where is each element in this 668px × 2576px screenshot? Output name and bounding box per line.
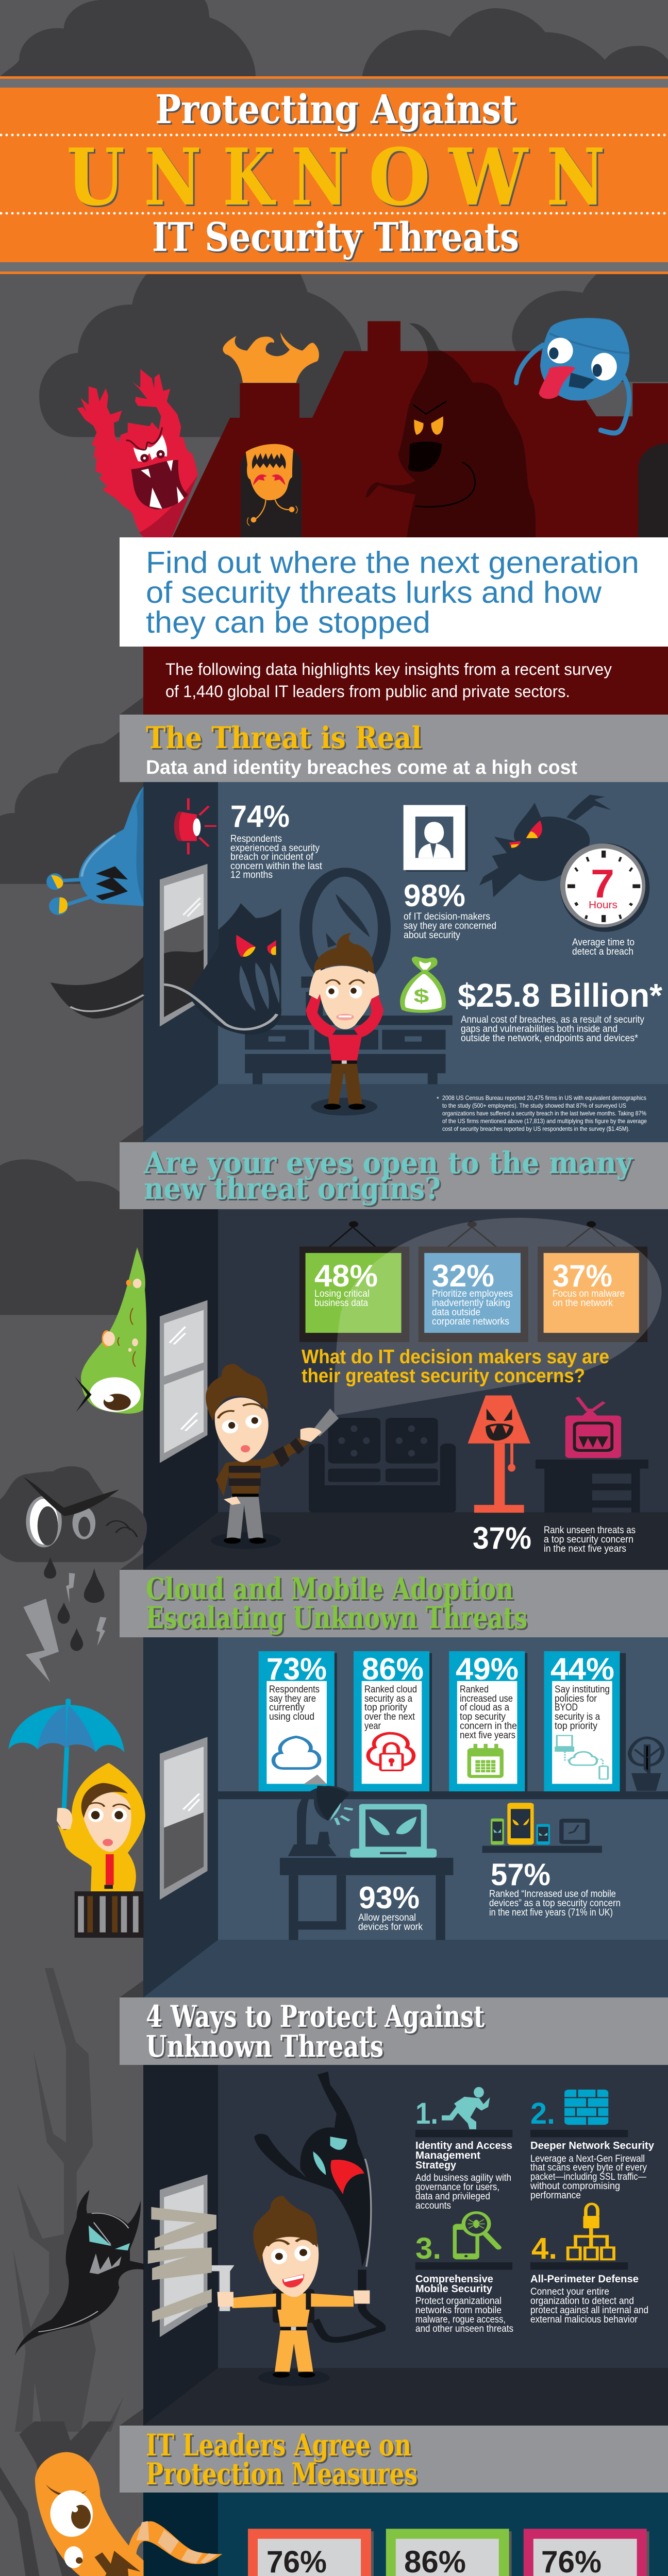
title banner: K bbox=[223, 131, 276, 223]
TV monster bbox=[565, 1397, 621, 1458]
title banner: IT Security Threats bbox=[152, 214, 519, 261]
stat: 93%: 93% bbox=[359, 1880, 420, 1915]
stat: 7 hours bbox=[572, 861, 634, 957]
way 3: networks from mobile bbox=[415, 2305, 502, 2316]
card stat: 49%: 49% bbox=[456, 1652, 519, 1686]
curious man with flashlight bbox=[206, 1364, 339, 1549]
card stat: 86%: top priority bbox=[364, 1702, 407, 1713]
heading: cloud and mobile: Cloud and Mobile Adoption bbox=[146, 1571, 513, 1606]
stat: 57%: in the next five years (71% in UK) bbox=[489, 1907, 613, 1918]
heading: the threat is real: Data and identity breaches come at a high cost bbox=[146, 757, 577, 778]
stat: 98%: 98% bbox=[404, 878, 465, 913]
stat: 57%: 57% bbox=[491, 1857, 550, 1892]
shelf and cards bbox=[218, 1651, 668, 1799]
way 2: packet—including SSL traffic— bbox=[530, 2172, 646, 2182]
stats: cloud cards bbox=[266, 1652, 621, 1933]
stat: 32%: corporate networks bbox=[432, 1316, 509, 1327]
stat: 98% bbox=[404, 878, 496, 941]
subheading: concerns bbox=[302, 1346, 609, 1387]
icon: network lock bbox=[568, 2204, 614, 2259]
card stat: 73%: currently bbox=[269, 1702, 305, 1713]
card stat: 86% bbox=[362, 1652, 424, 1732]
stat: $25.8 Billion bbox=[458, 977, 662, 1044]
icon: phone and magnifier bbox=[453, 2213, 498, 2259]
stat: 74%: Respondents bbox=[230, 834, 282, 844]
card stat: 49%: next five years bbox=[460, 1730, 515, 1741]
way 3: Protect organizational bbox=[415, 2296, 502, 2307]
card stat: 86%: year bbox=[364, 1721, 381, 1732]
card stat: 49%: Ranked bbox=[460, 1684, 489, 1695]
way 3: 3. bbox=[415, 2232, 441, 2265]
lamp monster bbox=[467, 1395, 530, 1513]
way 4: external malicious behavior bbox=[530, 2314, 638, 2325]
stat: 37% malware bbox=[553, 1259, 625, 1309]
card stat: 86%: security as a bbox=[364, 1693, 412, 1704]
card stat: 73%: Respondents bbox=[269, 1684, 320, 1695]
arched openings bbox=[241, 443, 668, 537]
way 1: accounts bbox=[415, 2200, 451, 2211]
card stat: 44%: policies for bbox=[555, 1693, 597, 1704]
icon: calendar bbox=[467, 1744, 504, 1778]
way 1: Add business agility with bbox=[415, 2173, 511, 2183]
heading: IT leaders agree: IT Leaders Agree on bbox=[146, 2428, 411, 2463]
stat: 93%: Allow personal bbox=[358, 1912, 416, 1923]
device shelf bbox=[482, 1803, 602, 1853]
icon: money bag: $ bbox=[414, 985, 429, 1006]
way 2: Deeper Network Security bbox=[530, 2140, 655, 2151]
panel: threat origins illustration bbox=[0, 1218, 662, 1562]
footnote: 2008 US Census Bureau reported 20,475 firms in US with equivalent demographics bbox=[442, 1094, 646, 1101]
card stat: 44%: Say instituting bbox=[555, 1684, 610, 1695]
stat: 98%: about security bbox=[404, 930, 460, 941]
evil storm cloud bbox=[0, 1466, 147, 1562]
red monster bbox=[77, 369, 198, 538]
title banner: O bbox=[369, 131, 430, 223]
umbrella girl bbox=[9, 1699, 145, 1938]
subheading: concerns: their greatest security concerns? bbox=[302, 1365, 585, 1387]
wall tree shadow lower bbox=[0, 2421, 113, 2576]
stat: 37% malware: Focus on malware bbox=[553, 1289, 625, 1299]
card stat: 49% bbox=[456, 1652, 519, 1741]
intro white box: they can be stopped bbox=[146, 605, 430, 639]
bars bbox=[415, 2130, 628, 2269]
card stat: 49%: increased use bbox=[460, 1693, 513, 1704]
heading: 4 ways bbox=[120, 1997, 668, 2065]
rain and lightning bbox=[23, 1557, 107, 1683]
orange window monster bbox=[246, 444, 297, 526]
stat: 37% unseen: Rank unseen threats as bbox=[544, 1525, 636, 1536]
heading: 4 ways: 4 Ways to Protect Against bbox=[146, 1999, 485, 2034]
stat: 7 hours: detect a breach bbox=[572, 946, 633, 957]
card stat: 49%: of cloud as a bbox=[460, 1702, 509, 1713]
intro white box bbox=[120, 537, 668, 647]
title banner: U bbox=[66, 131, 125, 223]
card stat: 73%: 73% bbox=[266, 1652, 327, 1686]
way 2 bbox=[530, 2097, 655, 2201]
intro white box: Find out where the next generation bbox=[146, 546, 639, 580]
way 4: protect against all internal and bbox=[530, 2305, 648, 2316]
haunted house scene bbox=[173, 318, 668, 537]
stat: 7 hours: Average time to bbox=[572, 937, 634, 948]
way 2: 2. bbox=[530, 2097, 555, 2130]
way 3: Mobile Security bbox=[415, 2283, 493, 2295]
stat: 7 hours: Hours bbox=[589, 900, 617, 911]
title banner: N bbox=[291, 131, 348, 223]
text: 4 ways list bbox=[415, 2097, 655, 2334]
way 4: 4. bbox=[531, 2232, 557, 2265]
footnote: of the US firms mentioned above (17,813) and multiplying this figure by the average bbox=[442, 1117, 647, 1125]
stat: 48%: Losing critical bbox=[314, 1289, 370, 1299]
stat: 7 hours: 7 bbox=[591, 861, 614, 906]
shadow creature bbox=[479, 794, 611, 897]
house silhouette bbox=[173, 321, 668, 537]
way 4 bbox=[530, 2232, 648, 2325]
icon: byod devices bbox=[556, 1736, 608, 1779]
survey note: of 1,440 global IT leaders from public and private sectors. bbox=[165, 682, 570, 701]
stat: 32%: 32% bbox=[432, 1259, 494, 1293]
icon: firewall bbox=[564, 2090, 608, 2125]
way 4: organization to detect and bbox=[530, 2296, 634, 2307]
way 2: Leverage a Next-Gen Firewall bbox=[530, 2154, 645, 2164]
panel: 4 ways illustration bbox=[15, 2072, 628, 2386]
dresser bbox=[239, 976, 453, 1084]
stat: $25.8 Billion: outside the network, endpoints and devices* bbox=[461, 1033, 639, 1044]
stat: 37% malware: on the network bbox=[553, 1298, 613, 1309]
stat: 74%: concern within the last bbox=[230, 861, 323, 872]
heading: threat origins: new threat origins? bbox=[144, 1171, 441, 1206]
heading: IT leaders agree bbox=[120, 2426, 668, 2493]
way 1: governance for users, bbox=[415, 2182, 499, 2193]
black window monster bbox=[15, 2190, 144, 2355]
card stat: 73%: using cloud bbox=[269, 1711, 314, 1722]
icon: money bag bbox=[400, 956, 446, 1013]
stat: 37% unseen: in the next five years bbox=[544, 1544, 626, 1554]
way 4: All-Perimeter Defense bbox=[530, 2274, 639, 2285]
stat: 37% unseen bbox=[473, 1521, 636, 1555]
way 2: that scans every byte of every bbox=[530, 2162, 647, 2173]
way 2: without compromising bbox=[530, 2181, 620, 2192]
title banner: N bbox=[144, 131, 202, 223]
title banner bbox=[0, 76, 668, 274]
tail bbox=[51, 956, 144, 1019]
left wall storm cloud bbox=[0, 711, 144, 884]
title banner: Protecting Against bbox=[155, 87, 517, 133]
ghost monster bbox=[365, 323, 536, 537]
footnote bbox=[437, 1094, 647, 1132]
title banner: W bbox=[447, 131, 529, 223]
wall tree shadow bbox=[13, 1968, 124, 2432]
room backgrounds bbox=[0, 782, 668, 2576]
heading: cloud and mobile: Escalating Unknown Threats bbox=[146, 1600, 527, 1635]
shadow monster bbox=[164, 903, 281, 1035]
subheading: concerns: What do IT decision makers say are bbox=[302, 1346, 609, 1368]
card stat: 86%: 86% bbox=[362, 1652, 424, 1686]
stat: 32%: inadvertently taking bbox=[432, 1298, 510, 1309]
stat: 93%: devices for work bbox=[358, 1922, 423, 1933]
hose ghost bbox=[254, 2072, 381, 2340]
stat: 37% unseen: a top security concern bbox=[544, 1534, 633, 1545]
blue monster bbox=[516, 318, 630, 433]
green slug monster bbox=[75, 1247, 146, 1414]
stat: 48% bbox=[314, 1259, 378, 1309]
footnote: to the study (500+ employees). The study showed that 87% of surveyed US bbox=[442, 1102, 626, 1109]
stat: 57% bbox=[489, 1857, 621, 1918]
way 2: performance bbox=[530, 2190, 581, 2201]
card stat: 86%: over the next bbox=[364, 1711, 415, 1722]
icon: plant bbox=[630, 1738, 663, 1791]
stat: 48%: business data bbox=[314, 1298, 368, 1309]
couch bbox=[309, 1418, 456, 1513]
stat: 32%: data outside bbox=[432, 1307, 480, 1318]
card stat: 86%: Ranked cloud bbox=[364, 1684, 417, 1695]
icon: locked cloud bbox=[368, 1733, 414, 1770]
flashlight beam bbox=[334, 1218, 662, 1416]
framed cards bbox=[248, 2529, 649, 2576]
boarded window bbox=[148, 2175, 216, 2337]
heading: 4 ways: Unknown Threats bbox=[146, 2029, 383, 2064]
intro white box: of security threats lurks and how bbox=[146, 575, 602, 609]
card stat: 44%: security is a bbox=[555, 1711, 600, 1722]
survey note bbox=[143, 647, 668, 715]
stat: 98%: of IT decision-makers bbox=[404, 911, 490, 922]
heading: cloud and mobile bbox=[120, 1570, 668, 1637]
window bbox=[160, 1737, 208, 1900]
orange monster bbox=[21, 2452, 222, 2576]
stats: threat origins bbox=[302, 1259, 636, 1555]
footnote: organizations have suffered a security breach in the last twelve months. Taking 87% bbox=[442, 1110, 646, 1117]
icon: cloud bbox=[273, 1737, 320, 1769]
card stat: 44%: 44% bbox=[550, 1652, 614, 1686]
stat: $25.8 Billion: $25.8 Billion* bbox=[458, 977, 662, 1014]
stat: 57%: Ranked “Increased use of mobile bbox=[489, 1889, 616, 1900]
card stat: 49%: concern in the bbox=[460, 1721, 517, 1732]
window bbox=[160, 1300, 208, 1463]
card stat: 44%: BYOD bbox=[555, 1702, 578, 1713]
desk, lamp and laptop bbox=[280, 1775, 453, 1940]
stat: 32%: Prioritize employees bbox=[432, 1289, 513, 1299]
icon: runner bbox=[442, 2087, 490, 2129]
way 3 bbox=[415, 2232, 513, 2334]
icon: portrait bbox=[404, 805, 467, 872]
stat: $25.8 Billion: gaps and vulnerabilities both inside and bbox=[461, 1024, 617, 1035]
stat: 74% bbox=[230, 799, 323, 880]
stat: 74%: breach or incident of bbox=[230, 852, 314, 862]
card stat: 44%: top priority bbox=[555, 1721, 597, 1732]
heading: threat origins bbox=[120, 1142, 668, 1209]
icon: alarm bbox=[174, 798, 216, 854]
way 1: 1. bbox=[415, 2097, 438, 2130]
top storm clouds bbox=[0, 0, 668, 437]
nightstand bbox=[536, 1460, 648, 1513]
icon: clock bbox=[560, 843, 649, 932]
firewall brick lines bbox=[564, 2090, 608, 2125]
card stat: 44% bbox=[550, 1652, 614, 1732]
mirror bbox=[306, 872, 385, 985]
window bbox=[160, 864, 208, 1026]
stat: 74%: experienced a security bbox=[230, 843, 320, 854]
stat: 57%: devices” as a top security concern bbox=[489, 1898, 621, 1909]
happy man with hammer bbox=[212, 2196, 370, 2386]
stat: 32% bbox=[432, 1259, 513, 1327]
panel: threat room illustration bbox=[46, 786, 649, 1115]
way 3: and other unseen threats bbox=[415, 2324, 513, 2334]
left wall second cloud bbox=[0, 1159, 144, 1315]
way 1 bbox=[415, 2097, 512, 2211]
stat: 37% malware: 37% bbox=[553, 1259, 612, 1293]
worried man bbox=[306, 933, 383, 1115]
heading: threat origins: Are your eyes open to the many bbox=[143, 1145, 633, 1180]
heading: the threat is real bbox=[120, 715, 668, 782]
heading: the threat is real: The Threat is Real bbox=[146, 720, 422, 755]
way 1: Management bbox=[415, 2150, 480, 2161]
way 3: Comprehensive bbox=[415, 2274, 493, 2285]
card stat: 49%: top security bbox=[460, 1711, 506, 1722]
wall triangle shadows bbox=[120, 697, 143, 2426]
blue hanging monster bbox=[46, 786, 144, 915]
chimney flame bbox=[223, 332, 319, 383]
card stat: 73%: say they are bbox=[269, 1693, 316, 1704]
stat: $25.8 Billion: Annual cost of breaches, as a result of security bbox=[461, 1014, 644, 1025]
stat: 98%: say they are concerned bbox=[404, 921, 496, 931]
stats: protection cards bbox=[266, 2545, 632, 2576]
survey note: The following data highlights key insights from a recent survey bbox=[165, 660, 612, 679]
way 1: Strategy bbox=[415, 2160, 457, 2171]
stat: 93% bbox=[358, 1880, 423, 1933]
stat: 48%: 48% bbox=[314, 1259, 378, 1293]
heading: IT leaders agree: Protection Measures bbox=[146, 2456, 417, 2492]
picture frames bbox=[299, 1221, 647, 1342]
way 3: malware, rogue access, bbox=[415, 2314, 506, 2325]
panel: protection room illustration bbox=[21, 2452, 668, 2576]
title banner: N bbox=[546, 131, 605, 223]
footnote: * bbox=[437, 1095, 439, 1103]
stat: 37% unseen: 37% bbox=[473, 1521, 531, 1555]
way 4: Connect your entire bbox=[530, 2286, 609, 2297]
panel: cloud room illustration bbox=[9, 1557, 668, 1940]
way 1: data and privileged bbox=[415, 2191, 490, 2202]
way 1: Identity and Access bbox=[415, 2140, 512, 2151]
footnote: cost of security breaches reported by US respondents in the survey ($1.45M). bbox=[442, 1125, 630, 1132]
stat: 74%: 74% bbox=[230, 799, 290, 834]
stat: 74%: 12 months bbox=[230, 870, 273, 880]
card stat: 73% bbox=[266, 1652, 327, 1722]
stats: threat room bbox=[230, 799, 662, 1132]
